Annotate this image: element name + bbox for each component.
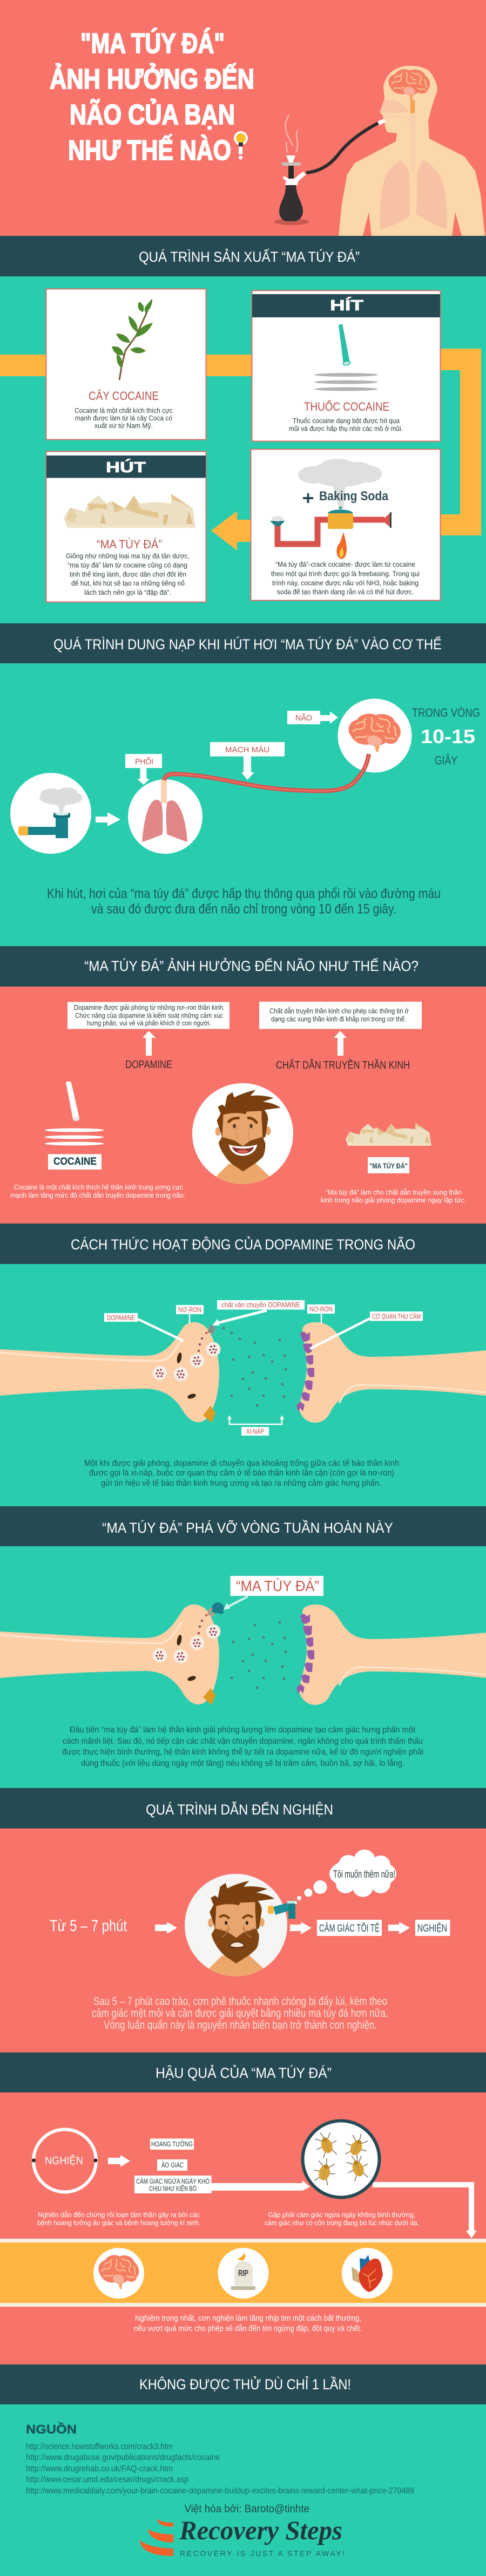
- text: smoking description: để hút, khi hút sẽ tạo ra những tiếng nổ: [71, 579, 185, 587]
- background: disruption teal: [0, 1546, 486, 1788]
- text: smoking description: [66, 552, 190, 596]
- label: cocaine: [48, 1154, 102, 1170]
- thought cloud: Tôi muốn thêm nữa!: [333, 1869, 395, 1880]
- label: receptor: [310, 1311, 423, 1349]
- label: ma tuy da: [368, 1157, 409, 1173]
- text: crack description: kinh trong não giải phóng dopamine ngay lập tức.: [321, 1196, 466, 1204]
- band: severe outcomes: [0, 2239, 486, 2307]
- stat: 10-15 seconds: [412, 706, 480, 767]
- box: itching: CHỊU NHƯ KIẾN BÒ: [149, 2185, 197, 2192]
- title: NHƯ THẾ NÀO: [68, 134, 231, 166]
- list: source urls: http://science.howstuffworks.com/crack3.htm: [26, 2442, 173, 2451]
- icon: heart: [342, 2248, 393, 2299]
- text: addiction description: cảm giác mệt mỏi và cần được giải quyết bằng nhiều ma túy đá hơn nữa.: [92, 2007, 388, 2020]
- text: disruption description: dùng thuốc (với liều dùng ngày một tăng) nếu không sẽ bị trầm cảm, buồn bã, sợ hãi, lo lắng.: [81, 1758, 404, 1768]
- icon: bugs in circle: [302, 2121, 379, 2198]
- text: addiction description: [92, 1995, 388, 2031]
- callout: neurotransmitter: dạng các xung thần kinh đi khắp nơi trong cơ thể.: [271, 1015, 406, 1023]
- header band: warning: [0, 2364, 486, 2404]
- text: mechanism description: Một khi được giải phóng, dopamine di chuyển qua khoảng trống giữa các tế bào thần kinh: [84, 1458, 399, 1468]
- arrow: [388, 1922, 410, 1934]
- title: [50, 28, 254, 166]
- panel: smoking (HÚT): HÚT: [106, 459, 146, 475]
- text: coca description: mạnh được làm từ lá cây Coca có: [75, 414, 172, 422]
- text: severe description: [134, 2314, 362, 2333]
- text: coca description: Cocaine là một chất kích thích cực: [75, 406, 173, 414]
- box: delusion: HOANG TƯỞNG: [151, 2140, 193, 2148]
- icon: gravestone: [218, 2248, 269, 2299]
- label: neuron left: NƠ-RON: [178, 1306, 201, 1314]
- dopamine particles: [222, 1327, 287, 1406]
- background: production teal: [0, 276, 486, 623]
- header band: production: QUÁ TRÌNH SẢN XUẤT “MA TÚY ĐÁ”: [139, 248, 360, 265]
- text: crack description: “Ma túy đá” làm cho chất dẫn truyền xung thần: [326, 1188, 462, 1196]
- label: receptor: CƠ QUAN THỤ CẢM: [372, 1313, 421, 1320]
- logo: recovery steps: Recovery Steps: [179, 2515, 342, 2545]
- background: absorption teal: [0, 663, 486, 946]
- logo: recovery steps: [140, 2515, 345, 2558]
- arrow: pipe to lungs: [96, 812, 120, 826]
- stat: 10-15 seconds: GIÂY: [435, 753, 457, 767]
- header band: dopamine mechanism: CÁCH THỨC HOẠT ĐỘNG CỦA DOPAMINE TRONG NÃO: [71, 1235, 415, 1253]
- label: baking soda: Baking Soda: [319, 489, 389, 504]
- text: itching description: [265, 2211, 419, 2227]
- text: freebasing description: theo một qui trình được gọi là freebasing. Trong qui: [271, 569, 420, 577]
- text: crack description: [321, 1188, 466, 1204]
- text: coca description: xuất xứ từ Nam Mỹ.: [94, 422, 153, 430]
- arrow: [290, 1922, 312, 1934]
- list: source urls: http://www.drugabuse.gov/publications/drugfacts/cocaine: [26, 2453, 220, 2462]
- panel: snorting (HÍT): THUỐC COCAINE: [304, 399, 389, 413]
- text: freebasing description: [271, 560, 420, 596]
- text: disruption description: Đầu tiên “ma túy đá” làm hệ thần kinh giải phóng lượng lớn dopamine tạo cảm giác hưng phấn một: [70, 1725, 415, 1735]
- header band: cycle broken: [0, 1506, 486, 1546]
- title: NÃO CỦA BẠN: [70, 99, 235, 131]
- icon: pale crack rock: [346, 1123, 431, 1146]
- icon: sad man: [185, 1874, 287, 1977]
- text: disruption description: [62, 1725, 423, 1768]
- icon: gravestone: RIP: [238, 2269, 248, 2278]
- icon: cooking apparatus: [270, 506, 392, 559]
- header band: absorption: QUÁ TRÌNH DUNG NẠP KHI HÚT HƠI “MA TÚY ĐÁ” VÀO CƠ THỂ: [53, 636, 442, 653]
- header band: consequences: HẬU QUẢ CỦA “MA TÚY ĐÁ”: [156, 2064, 332, 2081]
- header band: cycle broken: “MA TÚY ĐÁ” PHÁ VỠ VÒNG TUẦN HOÀN NÀY: [102, 1519, 393, 1536]
- icon: powder lines: [314, 373, 378, 391]
- background: addiction coral: [0, 1829, 486, 2052]
- background: effect coral: [0, 987, 486, 1224]
- panel: coca plant: CÂY COCAINE: [89, 389, 159, 403]
- thought cloud: [295, 1850, 396, 1904]
- text: mechanism description: được gọi là xi-náp, buộc cơ quan thụ cảm ở tế bào thần kinh lân cận (còn gọi là nơ-ron): [89, 1469, 394, 1478]
- header band: production: [0, 236, 486, 276]
- arrow: bugs to severe outcomes: [373, 2182, 477, 2238]
- text: freebasing description: trình này, cocaine được nấu với NH3, hoặc baking: [272, 579, 418, 587]
- header band: addiction: QUÁ TRÌNH DẪN ĐẾN NGHIỆN: [146, 1801, 333, 1818]
- title: ẢNH HƯỞNG ĐẾN: [50, 63, 254, 95]
- label: neuron left: [176, 1305, 204, 1323]
- box: itching: CẢM GIÁC NGỨA NGÁY KHÓ: [136, 2177, 210, 2185]
- arrow: [155, 1922, 177, 1934]
- label: dopamine pointer: DOPAMINE: [107, 1314, 135, 1322]
- icon: lungs in circle: [128, 779, 202, 854]
- list: source urls: http://www.medicaldaily.com/your-brain-cocaine-dopamine-buildup-excites-brains-reward-center-what-price-270489: [26, 2486, 414, 2496]
- label: brain: NÃO: [295, 713, 312, 723]
- diagram: disrupted synapse: [0, 1605, 486, 1705]
- background: hero: [0, 0, 486, 236]
- label: crack blocks transporter: “MA TÚY ĐÁ”: [236, 1578, 319, 1594]
- text: disruption description: cách mãnh liệt. Sau đó, nó tiếp cận các chất vận chuyển dopamine, ngăn không cho quá trình thẩm thấu: [63, 1736, 423, 1746]
- illustration: hookah: [274, 115, 386, 225]
- arrow: neurotransmitter up: [334, 1031, 347, 1056]
- label: ma tuy da: "MA TÚY ĐÁ": [369, 1161, 408, 1170]
- callout: neurotransmitter: [259, 1002, 422, 1029]
- label: transporter: chất vận chuyển DOPAMINE: [221, 1301, 300, 1309]
- list: source urls: http://www.cesar.umd.edu/cesar/drugs/crack.asp: [26, 2475, 188, 2484]
- panel: snorting (HÍT): [252, 290, 441, 441]
- credit: Việt hóa bởi: Baroto@tinhte: [185, 2503, 309, 2515]
- icon: small pipe: [268, 1901, 296, 1919]
- text: absorption description: và sau đó được đưa đến não chỉ trong vòng 10 đến 15 giây.: [91, 902, 396, 917]
- icon: rolled tube: [339, 324, 351, 366]
- callout: neurotransmitter: Chất dẫn truyền thần kinh cho phép các thông tin ở: [269, 1007, 409, 1015]
- header band: warning: KHÔNG ĐƯỢC THỬ DÙ CHỈ 1 LẦN!: [139, 2375, 351, 2393]
- box: delusion: [150, 2138, 194, 2150]
- background: consequences coral: [0, 2092, 486, 2364]
- background: footer teal: [0, 2404, 486, 2576]
- text: cocaine description: [10, 1183, 185, 1199]
- list: source urls: http://www.drugrehab.co.uk/FAQ-crack.htm: [26, 2464, 173, 2473]
- label: blood vessel: [210, 742, 285, 780]
- transporter: [208, 1325, 215, 1334]
- text: severe description: nếu vượt quá mức cho phép sẽ dẫn đến tim ngừng đập, đột quỵ và chết.: [134, 2324, 362, 2333]
- text: addiction description: Sau 5 – 7 phút cao trào, cơn phê thuốc nhanh chóng bị đẩy lùi, kèm theo: [93, 1995, 387, 2008]
- box: hallucination: ẢO GIÁC: [161, 2161, 184, 2169]
- icon: crack rock: [64, 494, 195, 528]
- text: psychosis: [37, 2211, 200, 2227]
- icon: coca plant: [112, 300, 153, 380]
- label: neuron right: [307, 1304, 335, 1323]
- icon: lightbulb question mark: [234, 131, 248, 160]
- box: hallucination: [157, 2159, 187, 2171]
- text: smoking description: lách tách nên gọi là “đập đá”.: [84, 588, 171, 596]
- text: smoking description: “ma túy đá” làm từ cocaine cũng có dạng: [68, 561, 187, 569]
- addiction ring: [32, 2130, 97, 2192]
- diagram: synapse: [0, 1322, 486, 1423]
- label: lungs: [125, 754, 162, 785]
- text: smoking description: Giống như những loại ma túy đá tân dược,: [66, 552, 190, 560]
- panel: freebasing: [251, 449, 441, 600]
- panel: snorting (HÍT): HÍT: [330, 297, 363, 314]
- text: freebasing description: “Ma túy đá”-crack cocaine- được làm từ cocaine: [275, 560, 415, 568]
- label: neurotransmitter: CHẤT DẪN TRUYỀN THẦN KINH: [276, 1059, 410, 1071]
- label: transporter: [212, 1300, 305, 1326]
- text: itching description: cảm giác như có côn trùng đang bò lúc nhúc dưới da.: [265, 2219, 419, 2227]
- callout: dopamine: hưng phấn, vui vẻ và phấn khích ở con người.: [87, 1019, 211, 1027]
- label: synapse gap bracket: XI-NÁP: [246, 1427, 264, 1436]
- text: addiction description: Vòng luẩn quẩn này là nguyên nhân biến bạn trở thành con nghiện.: [104, 2019, 377, 2031]
- icon: white tube and powder: [44, 1082, 104, 1145]
- text: absorption description: [47, 886, 441, 917]
- text: smoking description: tinh thể lóng lánh, được dân chơi đốt lên: [70, 570, 186, 579]
- text: mechanism description: [84, 1458, 399, 1488]
- box: itching: [134, 2176, 212, 2193]
- list: source urls: [26, 2442, 414, 2496]
- logo: recovery steps: RECOVERY IS JUST A STEP AWAY!: [180, 2549, 345, 2558]
- panel: smoking (HÚT): [46, 451, 206, 602]
- label: synapse gap bracket: [227, 1415, 284, 1436]
- box: feeling terrible: CẢM GIÁC TỒI TỆ: [319, 1922, 380, 1934]
- text: coca description: [75, 406, 173, 430]
- arrow: [108, 2155, 130, 2167]
- box: addicted: [415, 1920, 450, 1936]
- panel: coca plant: [46, 289, 206, 439]
- arrow: itching to bugs: [211, 2180, 310, 2191]
- heading: sources: NGUỒN: [26, 2422, 77, 2436]
- text: freebasing description: soda để tạo thành dạng rắn và có thể hút được.: [277, 588, 414, 596]
- label: dopamine pointer: [104, 1313, 183, 1341]
- icon: brain in circle: [338, 698, 411, 773]
- header band: effect on brain: [0, 946, 486, 987]
- particles: [230, 1621, 287, 1689]
- box: addicted: NGHIỆN: [417, 1922, 447, 1934]
- text: itching description: Gặp phải cảm giác ngứa ngáy không bình thường,: [268, 2211, 415, 2219]
- header band: consequences: [0, 2052, 486, 2092]
- text: snorting description: [289, 417, 403, 433]
- icon: brain: [93, 2248, 144, 2299]
- arrow: dopamine up: [143, 1031, 156, 1056]
- illustration: person body: [339, 66, 485, 236]
- header band: addiction: [0, 1788, 486, 1829]
- label: cocaine: COCAINE: [53, 1156, 97, 1167]
- text: cocaine description: mạnh làm tăng mức độ chất dẫn truyền dopamine trong não.: [10, 1191, 185, 1199]
- text: disruption description: được thực hiện bình thường, hệ thần kinh không thể tự tiết ra dopamine nữa, kể từ đó người nghiện phải: [62, 1747, 423, 1757]
- header band: absorption: [0, 623, 486, 663]
- text: psychosis: Nghiện dẫn đến chứng rối loạn tâm thần gây ra bởi các: [38, 2211, 200, 2219]
- title: "MA TÚY ĐÁ": [80, 28, 225, 59]
- header band: effect on brain: “MA TÚY ĐÁ” ẢNH HƯỞNG ĐẾN NÃO NHƯ THẾ NÀO?: [84, 957, 418, 974]
- arrow: orange flow path: [0, 349, 481, 550]
- box: feeling terrible: [317, 1920, 382, 1936]
- label: lungs: PHỔI: [135, 757, 153, 766]
- label: blood vessel: MẠCH MÁU: [225, 745, 269, 755]
- text: psychosis: bệnh hoang tưởng ảo giác và bệnh hoang tưởng kí sinh.: [37, 2219, 200, 2227]
- stat: 10-15 seconds: 10-15: [421, 725, 475, 747]
- text: severe description: Nghiêm trọng nhất, cơn nghiện làm tăng nhịp tim một cách bất thường,: [135, 2314, 361, 2323]
- background: mechanism teal: [0, 1264, 486, 1506]
- text: mechanism description: gửi tín hiệu về tế bào thần kinh trung ương và tạo ra những cảm giác hưng phấn.: [101, 1479, 381, 1488]
- text: snorting description: Thuốc cocaine dạng bột được hít qua: [293, 417, 400, 425]
- icon: pipe in circle: [10, 773, 91, 854]
- blood vessel: [164, 754, 369, 791]
- text: snorting description: mũi và được hấp thụ nhờ các mô ở mũi.: [289, 424, 403, 433]
- addiction ring: NGHIỆN: [45, 2154, 83, 2167]
- icon: happy man: [192, 1083, 293, 1185]
- callout: dopamine: [68, 1002, 230, 1029]
- text: cocaine description: Cocaine là một chất kích thích hệ thần kinh trung ương cực: [14, 1183, 183, 1191]
- text: 5-7 minutes: Từ 5 – 7 phút: [50, 1917, 127, 1935]
- callout: dopamine: Dopamine được giải phóng từ những nơ–ron thần kinh.: [74, 1003, 225, 1011]
- callout: dopamine: Chức năng của dopamine là kiểm soát những cảm xúc: [75, 1011, 223, 1019]
- label: dopamine: DOPAMINE: [125, 1059, 172, 1071]
- panel: smoking (HÚT): “MA TÚY ĐÁ”: [97, 538, 162, 551]
- icon: steam cloud: [298, 459, 382, 510]
- label: crack blocks transporter: [212, 1576, 323, 1615]
- label: neuron right: NƠ-RON: [309, 1305, 333, 1313]
- header band: dopamine mechanism: [0, 1224, 486, 1264]
- label: brain: [287, 711, 338, 724]
